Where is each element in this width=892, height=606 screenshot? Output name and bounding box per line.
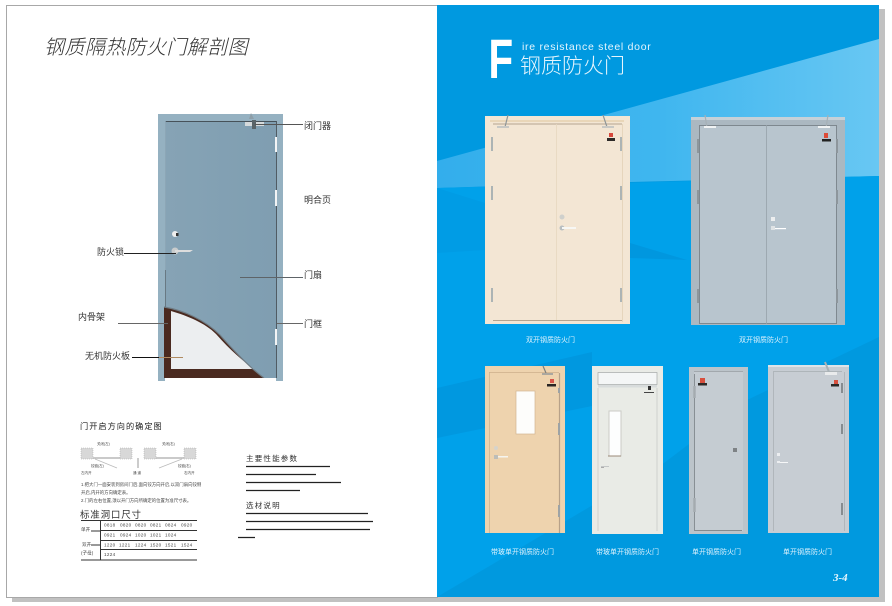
door: white single with transom [592, 366, 663, 534]
size table: 1224 [104, 552, 116, 557]
English title: ire resistance steel door [522, 41, 651, 53]
size table: 单开 [81, 526, 91, 533]
size table: 双开 [82, 542, 92, 548]
direction notes: 2.门的左右位置,须以开门方向所确定的位置为准尺寸表。 [81, 497, 191, 504]
door: tan single with window [485, 366, 565, 533]
size table: 0818 [104, 522, 116, 528]
size table: (子母) [81, 550, 94, 556]
callout labels: 内骨架 [78, 311, 105, 322]
callout labels: 防火锁 [97, 246, 124, 257]
door leaf [165, 121, 276, 378]
caption: double door 2: 双开钢质防火门 [739, 335, 788, 344]
door closer [245, 113, 264, 129]
size table: 1021 [150, 532, 162, 538]
door: grey double [691, 115, 845, 325]
panel: left page [6, 6, 438, 598]
fireproof board [171, 311, 254, 369]
background light facets [437, 39, 879, 597]
door: cream double [485, 115, 630, 324]
brand letter F: F [488, 29, 513, 91]
heading: standard opening sizes: 标准洞口尺寸 [80, 509, 142, 521]
door direction diagram: 铰链(右) [178, 463, 191, 468]
door: grey single 2 [768, 362, 849, 533]
size table: 1521 [165, 542, 177, 548]
heading: main performance: 主要性能参数 [246, 453, 298, 463]
callout labels: 明合页 [304, 194, 331, 205]
size table: 0820 [135, 522, 147, 528]
size table: 1020 [135, 532, 147, 538]
title: 钢质隔热防火门解剖图 [44, 37, 251, 59]
heading: door opening direction: 门开启方向的确定图 [80, 421, 163, 431]
door direction diagram: 关闭(右) [162, 441, 175, 446]
callout labels: 门框 [304, 318, 322, 329]
size table: 0820 [120, 522, 132, 528]
callout labels: 无机防火板 [85, 350, 130, 361]
door direction diagram: 关闭(左) [97, 441, 110, 446]
lock and handle [172, 231, 193, 254]
caption: window door 2: 带玻单开钢质防火门 [596, 547, 659, 556]
size table: 0921 [104, 532, 116, 538]
bottom gap [165, 378, 276, 381]
size table: 1024 [165, 532, 177, 538]
size table: 0824 [165, 522, 177, 528]
direction notes: 1.把大门一面安装到房间门后,面向铰方向开启,以双门扇向铰侧 [81, 481, 202, 488]
door direction diagram: 左内开 [81, 470, 92, 475]
Chinese title: 钢质防火门 [520, 55, 625, 78]
caption: single door 1: 单开钢质防火门 [692, 547, 741, 556]
cut-away inner frame [164, 307, 264, 378]
panel: right page [437, 5, 879, 597]
size table: 0924 [120, 532, 132, 538]
size table: 1524 [181, 542, 193, 548]
hinges [275, 137, 277, 152]
door direction diagram: 铰链(左) [91, 463, 104, 468]
direction notes: 开启,内开的方向确定表。 [81, 489, 131, 496]
callout labels [78, 120, 331, 361]
size table: 0920 [181, 522, 193, 528]
size table: 1221 [119, 542, 131, 548]
size table [81, 520, 197, 560]
size table: 1220 [104, 542, 116, 548]
door: grey single 1 [689, 367, 748, 534]
size table: 0821 [150, 522, 162, 528]
caption: single door 2: 单开钢质防火门 [783, 547, 832, 556]
door cross-section diagram [158, 113, 283, 381]
redacted performance lines [246, 466, 341, 490]
door frame [158, 114, 283, 381]
caption: window door 1: 带玻单开钢质防火门 [491, 547, 554, 556]
direction notes [81, 481, 202, 504]
caption: double door 1: 双开钢质防火门 [526, 335, 575, 344]
heading: material notes: 选材说明 [246, 500, 281, 510]
redacted material lines [238, 514, 373, 538]
callout labels: 门扇 [304, 269, 322, 280]
door direction diagram: 右内开 [184, 470, 195, 475]
size table: 1224 [135, 542, 147, 548]
size table: 1520 [150, 542, 162, 548]
page number: 3-4 [832, 572, 848, 584]
door direction diagram: 通 道 [133, 470, 141, 475]
callout labels: 闭门器 [304, 120, 331, 131]
callout lines [118, 124, 303, 358]
door direction diagram [81, 441, 196, 475]
